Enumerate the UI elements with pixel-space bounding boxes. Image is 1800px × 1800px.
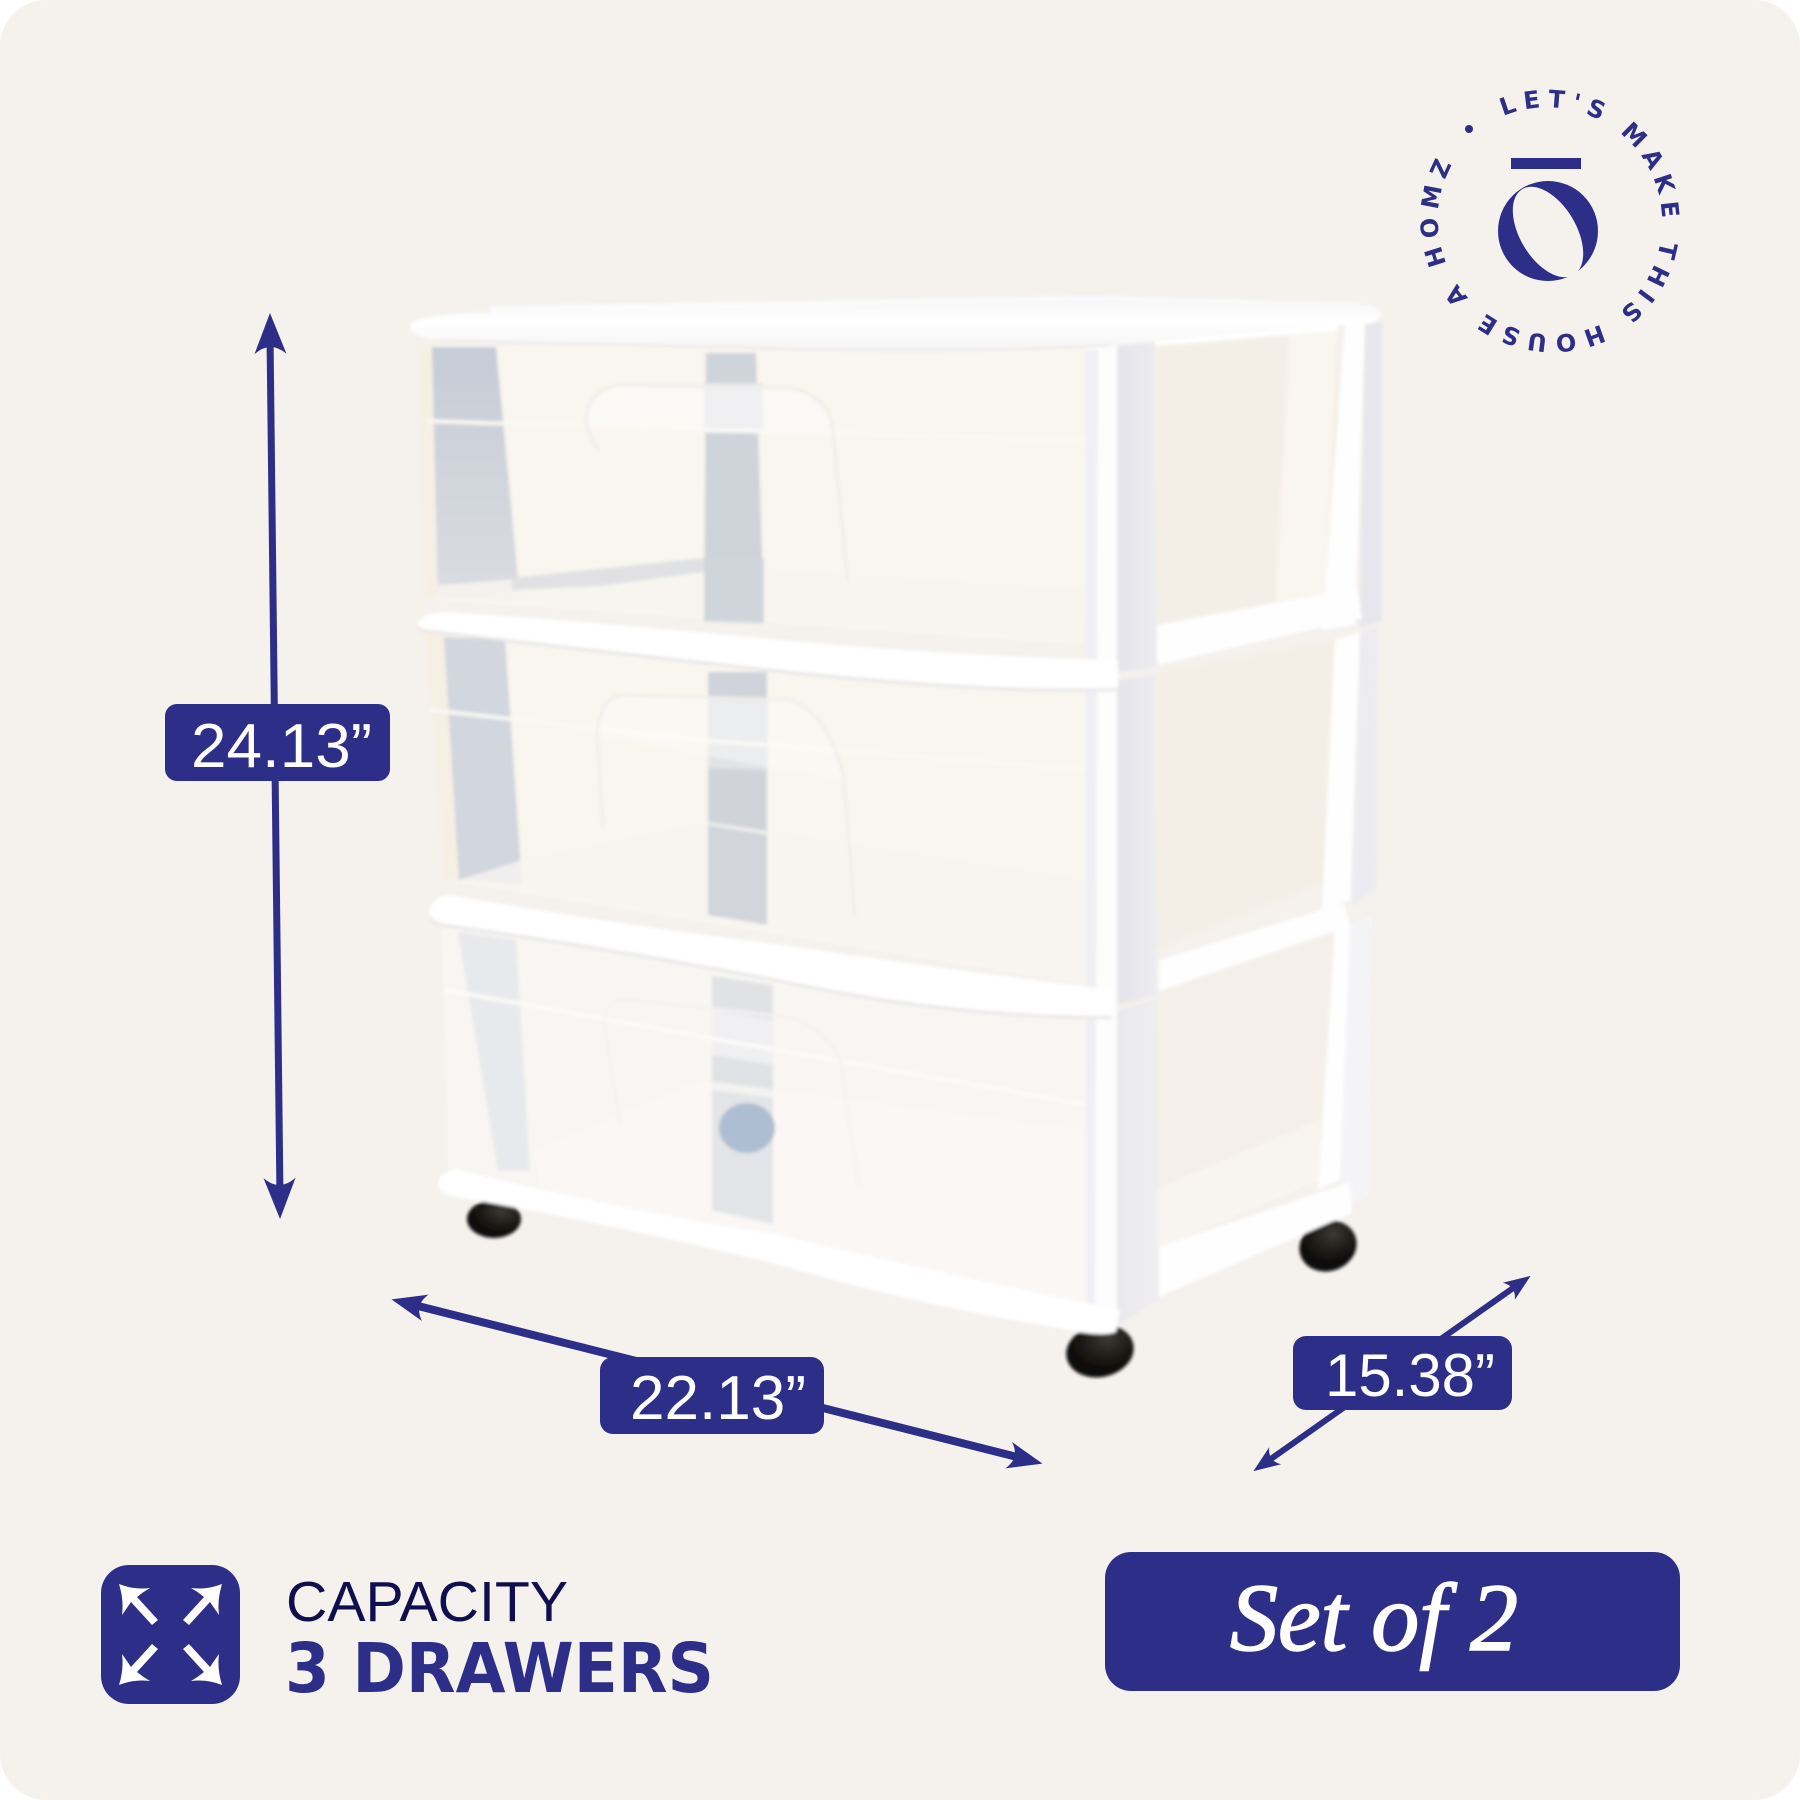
front rail 1 [417,612,1118,692]
dimension: depth arrow [1247,1267,1537,1480]
drawer 3 body [442,925,1095,1310]
side panels [1155,327,1338,1250]
drawer 1 body [418,345,1090,645]
dimension: height arrow [165,313,390,1219]
label: height: 24.13” [191,712,372,781]
callout: set of 2 [1105,1552,1680,1691]
caster: back left [467,1200,521,1238]
caster: back right [1292,1213,1364,1279]
logo mark [1498,158,1598,289]
brand seal [1420,90,1680,352]
label: depth: 15.38” [1325,1342,1495,1409]
front right post [1085,342,1159,1325]
caster: front [1061,1318,1139,1384]
callout: set of 2: Set of 2 [1230,1564,1518,1671]
side rails [1155,326,1362,1297]
label: width: 22.13” [630,1364,806,1433]
capacity text: CAPACITY [286,1570,568,1634]
front rail 2 [429,895,1112,1019]
top rim [410,296,1381,350]
front rail 3 base [438,1170,1120,1334]
capacity text [285,1570,714,1709]
drawer 2 body [425,632,1090,985]
back right post [1318,322,1382,1210]
circular slogan: LET'S MAKE THIS HOUSE A HOMZ [1420,90,1680,352]
icon: capacity expand arrows [101,1565,240,1704]
product: three drawer storage cart [410,296,1382,1384]
drawer lip [425,421,1090,440]
drawer floor [436,565,1084,645]
capacity text: 3 DRAWERS [285,1629,714,1709]
blue object behind drawer [719,1103,775,1153]
handle [586,385,834,432]
interior gray strips [432,347,520,600]
dimension: width arrow [388,1286,1046,1477]
